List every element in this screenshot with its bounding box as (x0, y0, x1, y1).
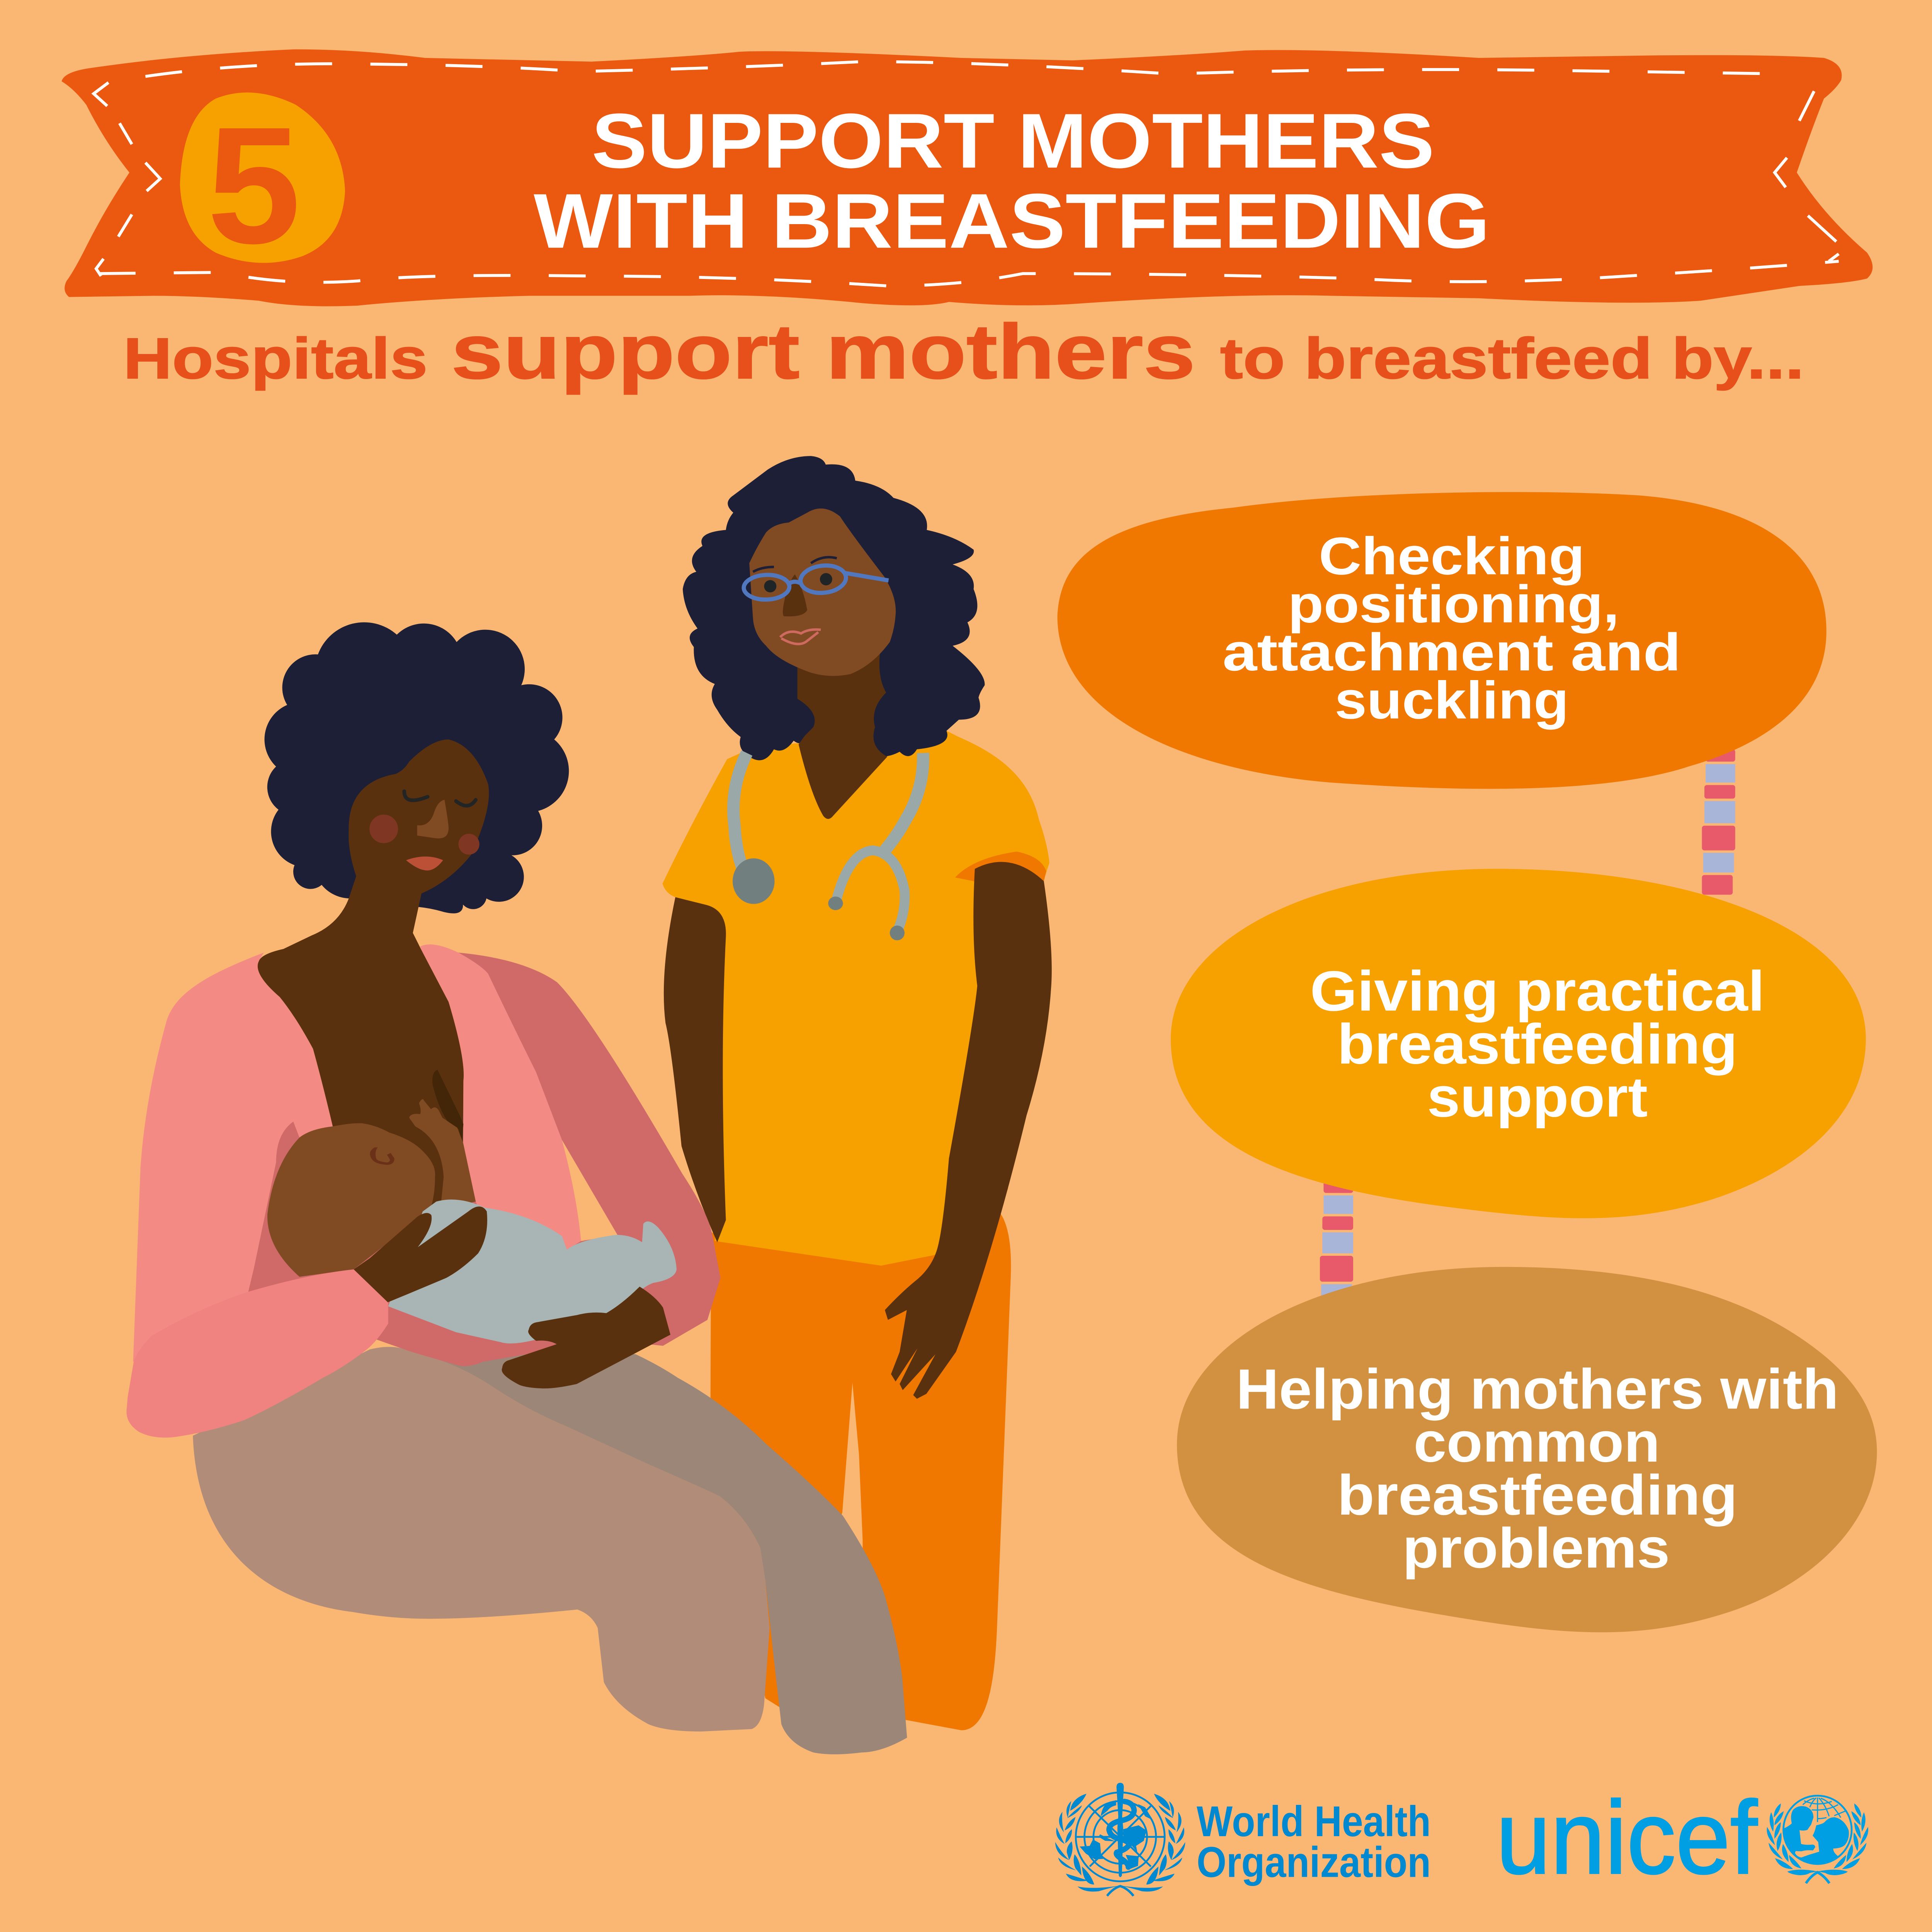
WHO emblem (1055, 1783, 1185, 1896)
bubble 2 text: breastfeeding (1337, 1012, 1738, 1076)
logo: unicef (1496, 1779, 1868, 1895)
unicef mother and child (1784, 1806, 1849, 1865)
WHO wordmark: Organization (1197, 1838, 1431, 1886)
WHO serpent head (1100, 1800, 1116, 1816)
banner title text: WITH BREASTFEEDING (534, 177, 1490, 264)
baby arm (409, 1099, 476, 1214)
bubble 3 text: common (1413, 1411, 1660, 1474)
panel: bubble 1 checking positioning (1058, 492, 1827, 789)
nurse arm right (885, 862, 1052, 1399)
nurse arm left (664, 897, 726, 1242)
unicef emblem (1767, 1796, 1868, 1883)
bubble 3 text: Helping mothers with (1236, 1357, 1839, 1421)
baby body (388, 1199, 677, 1344)
panel: bubble 2 practical support (1171, 869, 1866, 1218)
WHO staff (1116, 1783, 1124, 1877)
mother hand under baby head (354, 1206, 487, 1303)
WHO continents (1080, 1804, 1153, 1869)
nurse eyes (764, 573, 832, 592)
WHO globe rings (1076, 1793, 1165, 1881)
bubble 2 text: Giving practical (1310, 959, 1765, 1023)
illustration: nurse (663, 456, 1052, 1730)
mother front sleeve (126, 1269, 388, 1437)
WHO serpent (1109, 1801, 1134, 1867)
nurse glasses (743, 563, 889, 600)
unicef laurel left (1767, 1803, 1818, 1875)
bubble 3 text: problems (1403, 1517, 1670, 1580)
illustration: mother and baby (126, 622, 907, 1754)
banner stitching (94, 61, 1839, 286)
mother lips (406, 857, 443, 871)
panel: bubble 3 common problems (1177, 1267, 1877, 1632)
bubble 1 text (1223, 527, 1681, 730)
baby head (267, 1123, 435, 1277)
unicef globe (1783, 1796, 1852, 1864)
bubble 2 text: support (1427, 1066, 1648, 1129)
subtitle: Hospitals (123, 326, 428, 391)
WHO laurel right (1120, 1794, 1185, 1891)
mother cardigan left body (133, 952, 333, 1362)
nurse sleeve trim (955, 852, 1046, 883)
title banner (61, 49, 1872, 306)
mother cardigan right front (420, 944, 581, 1250)
bubble 1 text: Checking (1319, 527, 1585, 586)
banner ribbon shape (61, 49, 1872, 306)
mother trousers far leg (370, 1337, 907, 1754)
mother cheeks (369, 815, 480, 855)
stethoscope (733, 753, 923, 940)
WHO laurel left (1055, 1794, 1120, 1891)
unicef wordmark: unicef (1496, 1779, 1758, 1895)
mother hand holding baby (502, 1287, 670, 1388)
logo: World Health Organization (1055, 1783, 1431, 1896)
bubble 1 text: positioning, (1288, 575, 1619, 634)
nurse trousers (711, 1214, 1011, 1730)
badge blob (180, 92, 345, 263)
number 5: 5 (207, 92, 301, 278)
number badge (180, 92, 345, 278)
mother cardigan far arm (248, 952, 721, 1366)
baby arm shadow (401, 1126, 444, 1214)
nurse face (749, 509, 896, 676)
subtitle: to breastfeed by... (1220, 326, 1804, 391)
mother trousers near leg (193, 1347, 770, 1731)
nurse nose (783, 574, 807, 616)
WHO wordmark (1197, 1797, 1431, 1886)
bubble 3 text: breastfeeding (1337, 1464, 1738, 1527)
baby ear (370, 1147, 395, 1165)
banner title text (534, 97, 1490, 264)
bubble 1 text: attachment and (1223, 623, 1681, 682)
banner title text: SUPPORT MOTHERS (592, 97, 1434, 184)
bubble 2 text (1310, 959, 1765, 1129)
WHO wordmark: World Health (1197, 1797, 1431, 1845)
nurse neck and chest (798, 653, 887, 819)
WHO ribbon tails (1107, 1886, 1133, 1896)
nurse lips (780, 629, 821, 644)
bubble 3 text (1236, 1357, 1839, 1580)
connector: stripes between bubble 2 and 3 (1320, 1180, 1353, 1296)
mother hair (264, 622, 569, 913)
subtitle: support mothers (451, 308, 1196, 395)
bubble 1 text: suckling (1335, 671, 1569, 730)
subtitle (123, 308, 1804, 395)
nurse eyebrows (753, 557, 837, 572)
connector: stripes between bubble 1 and 2 (1702, 749, 1735, 895)
nurse hair (683, 456, 985, 760)
background gap inside the arm (562, 1140, 617, 1241)
shadow finger on breast (432, 1070, 463, 1143)
nurse scrub top (663, 731, 1049, 1266)
unicef laurel right (1818, 1803, 1868, 1875)
mother closed eyes (404, 791, 476, 806)
mother nose (417, 800, 449, 838)
mother skin face and chest (258, 740, 489, 1208)
stethoscope chest piece (733, 858, 775, 904)
unicef ribbon tails (1806, 1872, 1829, 1883)
